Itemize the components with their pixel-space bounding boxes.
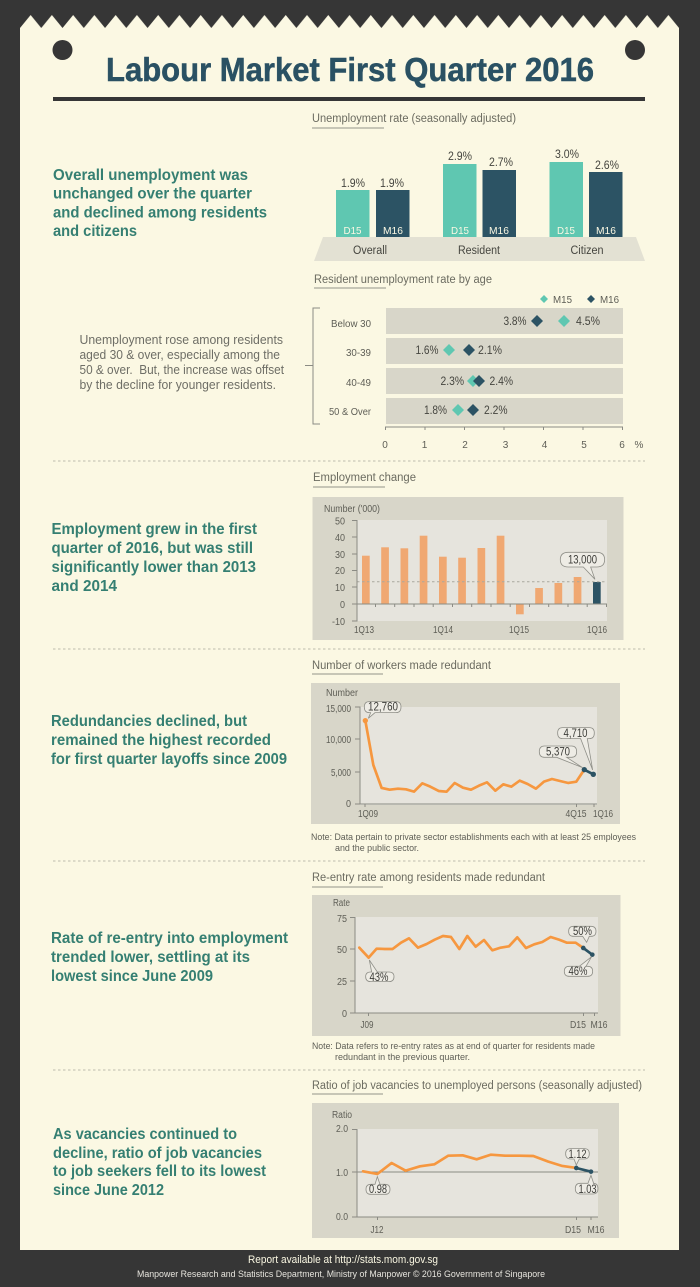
bar chart: unemployment rate: D15 bbox=[557, 225, 575, 237]
panel: overall unemployment heading: unchanged over the quarter bbox=[53, 186, 252, 202]
bar chart: employment change: 20 bbox=[335, 566, 345, 577]
callout: 13,000: 13,000 bbox=[568, 554, 597, 566]
text block: age commentary: aged 30 & over, especially among the bbox=[80, 348, 280, 362]
callout: 46% bbox=[564, 957, 593, 978]
chart title: employment change: Employment change bbox=[313, 472, 416, 484]
dot chart: unemployment by age: 4 bbox=[542, 440, 548, 451]
bar chart: employment change: 1Q15 bbox=[509, 625, 529, 636]
panel: overall unemployment heading: and declined among residents bbox=[53, 204, 267, 222]
text block: age commentary bbox=[80, 333, 284, 392]
line chart: redundancies: 1Q16 bbox=[593, 809, 613, 820]
line chart: vacancy ratio: 2.0 bbox=[336, 1124, 348, 1135]
bar chart: unemployment rate: M16 bbox=[383, 225, 403, 237]
line chart: re-entry rate: 25 bbox=[337, 977, 347, 988]
dot chart: unemployment by age: 1.8% bbox=[424, 405, 447, 417]
bar chart: unemployment rate: D15 bbox=[451, 225, 469, 237]
line chart: redundancies: 15,000 bbox=[326, 704, 351, 715]
line chart: vacancy ratio bbox=[312, 1103, 619, 1238]
panel: redundancies heading: for first quarter layoffs since 2009 bbox=[51, 751, 287, 768]
footer: Report available at http://stats.mom.gov.sg bbox=[248, 1254, 438, 1266]
line chart: vacancy ratio: Ratio bbox=[332, 1110, 352, 1121]
dot chart: unemployment by age: 5 bbox=[581, 440, 587, 451]
line chart: redundancies: 1Q09 bbox=[358, 809, 378, 820]
bar chart: unemployment rate: D15 bbox=[344, 225, 362, 237]
panel: employment heading: and 2014 bbox=[52, 578, 117, 595]
dot chart: unemployment by age: 50 & Over bbox=[329, 407, 372, 418]
dot chart: unemployment by age: 2 bbox=[462, 440, 468, 451]
callout: 1.03: 1.03 bbox=[578, 1184, 596, 1196]
note: redundancies bbox=[311, 832, 636, 853]
dot chart: unemployment by age: 30-39 bbox=[346, 348, 371, 359]
panel: re-entry heading: trended lower, settling at its bbox=[51, 949, 250, 966]
chart title: workers made redundant: Number of workers made redundant bbox=[312, 660, 492, 672]
bar chart: employment change: 30 bbox=[335, 550, 345, 561]
chart title: unemployment rate: Unemployment rate (seasonally adjusted) bbox=[312, 113, 516, 125]
panel: re-entry heading: Rate of re-entry into employment bbox=[51, 930, 288, 947]
panel: vacancies heading: decline, ratio of job vacancies bbox=[53, 1145, 262, 1162]
callout: 43%: 43% bbox=[370, 972, 388, 984]
callout: 5,370 bbox=[539, 746, 583, 768]
bar chart: employment change: 0 bbox=[340, 600, 345, 611]
text block: age commentary: Unemployment rose among residents bbox=[80, 333, 283, 347]
line chart: redundancies: 10,000 bbox=[326, 735, 351, 746]
bar chart: unemployment rate: Overall bbox=[353, 245, 387, 257]
dot chart: unemployment by age: 2.3% bbox=[440, 376, 464, 388]
dot chart: unemployment by age: 4.5% bbox=[576, 316, 600, 328]
dot chart: unemployment by age: 3 bbox=[503, 440, 509, 451]
callout: 0.98 bbox=[366, 1177, 390, 1196]
line chart: vacancy ratio: 1.0 bbox=[336, 1168, 348, 1179]
panel: vacancies heading bbox=[53, 1126, 266, 1199]
bar chart: unemployment rate: Resident bbox=[458, 245, 501, 257]
bar chart: unemployment rate bbox=[314, 149, 645, 261]
chart legend: M15 and M16: M16 bbox=[600, 295, 619, 306]
line chart: re-entry rate: J09 bbox=[360, 1020, 374, 1031]
callout: 50%: 50% bbox=[573, 926, 592, 938]
dot chart: unemployment by age: 0 bbox=[382, 440, 388, 451]
panel: overall unemployment heading: Overall unemployment was bbox=[53, 167, 248, 184]
title: Labour Market First Quarter 2016 bbox=[106, 51, 594, 88]
bar chart: unemployment rate: Citizen bbox=[570, 245, 604, 257]
chart title: vacancy ratio: Ratio of job vacancies to unemployed persons (seasonally adjusted) bbox=[312, 1080, 642, 1092]
callout: 50% bbox=[569, 926, 596, 942]
callout: 43% bbox=[366, 960, 394, 984]
line chart: redundancies bbox=[311, 683, 620, 824]
line chart: re-entry rate: Rate bbox=[333, 898, 350, 909]
panel: employment heading: Employment grew in the first bbox=[52, 521, 257, 538]
callout: 12,760: 12,760 bbox=[368, 702, 398, 714]
panel: redundancies heading bbox=[51, 713, 287, 768]
bar chart: unemployment rate: 2.9% bbox=[448, 151, 472, 163]
text block: age commentary: 50 & over. But, the increase was offset bbox=[80, 363, 284, 377]
callout: 1.03 bbox=[575, 1175, 598, 1196]
callout: 12,760 bbox=[364, 702, 401, 718]
chart title: re-entry rate: Re-entry rate among residents made redundant bbox=[312, 872, 546, 884]
note: redundancies: Note: Data pertain to private sector establishments each with at least 25 employees bbox=[311, 832, 636, 842]
panel: vacancies heading: to job seekers fell to its lowest bbox=[53, 1163, 266, 1180]
callout: 1.12 bbox=[566, 1149, 589, 1165]
bar chart: employment change: 10 bbox=[335, 583, 345, 594]
panel: employment heading: quarter of 2016, but was still bbox=[52, 540, 253, 557]
callout: 5,370: 5,370 bbox=[546, 746, 570, 758]
callout: 46%: 46% bbox=[568, 966, 588, 978]
bar chart: employment change bbox=[312, 497, 624, 640]
panel: redundancies heading: remained the highest recorded bbox=[51, 732, 271, 749]
chart legend: M15 and M16: M15 bbox=[553, 295, 572, 306]
line chart: re-entry rate: 75 bbox=[337, 914, 347, 925]
panel: overall unemployment heading: and citizens bbox=[53, 223, 137, 240]
text block: age commentary: by the decline for younger residents. bbox=[80, 378, 276, 392]
title rule bbox=[53, 97, 645, 101]
dot chart: unemployment by age: 3.8% bbox=[504, 316, 526, 328]
bar chart: unemployment rate: M16 bbox=[596, 225, 616, 237]
chart legend: M15 and M16 bbox=[540, 295, 619, 306]
panel: redundancies heading: Redundancies declined, but bbox=[51, 713, 247, 730]
dot chart: unemployment by age: % bbox=[635, 440, 644, 451]
line chart: re-entry rate: M16 bbox=[590, 1020, 608, 1031]
bar chart: employment change: 40 bbox=[335, 533, 345, 544]
note: re-entry: redundant in the previous quarter. bbox=[335, 1052, 470, 1062]
icon: right punch hole bbox=[625, 40, 645, 60]
line chart: re-entry rate bbox=[312, 895, 620, 1036]
panel: employment heading bbox=[52, 521, 257, 595]
line chart: re-entry rate: 50 bbox=[337, 945, 347, 956]
panel: employment heading: significantly lower than 2013 bbox=[52, 559, 256, 576]
dot chart: unemployment by age: 40-49 bbox=[346, 378, 371, 389]
panel: overall unemployment heading bbox=[53, 167, 267, 240]
bar chart: employment change: -10 bbox=[332, 617, 345, 628]
bar chart: employment change: 50 bbox=[335, 516, 345, 528]
callout: 4,710: 4,710 bbox=[564, 728, 588, 740]
line chart: vacancy ratio: J12 bbox=[370, 1225, 384, 1236]
bar chart: unemployment rate: M16 bbox=[489, 225, 509, 237]
footer bbox=[137, 1254, 545, 1280]
bar chart: unemployment rate: 2.7% bbox=[489, 157, 513, 169]
dot chart: unemployment by age: 1 bbox=[422, 440, 428, 451]
dot chart: unemployment by age: 1.6% bbox=[416, 345, 438, 357]
bar chart: unemployment rate: 2.6% bbox=[595, 160, 619, 172]
dot chart: unemployment by age: Below 30 bbox=[331, 319, 371, 330]
line chart: re-entry rate: 0 bbox=[342, 1009, 347, 1020]
bar chart: employment change: 1Q13 bbox=[354, 625, 374, 636]
line chart: redundancies: 5,000 bbox=[331, 768, 351, 779]
panel: re-entry heading: lowest since June 2009 bbox=[51, 968, 213, 985]
line chart: vacancy ratio: 0.0 bbox=[336, 1212, 348, 1223]
icon: left punch hole bbox=[52, 40, 72, 60]
chart title: resident unemployment by age: Resident unemployment rate by age bbox=[314, 274, 492, 286]
line chart: redundancies: Number bbox=[326, 688, 359, 699]
line chart: re-entry rate: D15 bbox=[570, 1020, 586, 1031]
panel: vacancies heading: As vacancies continued to bbox=[53, 1126, 237, 1143]
note: re-entry bbox=[312, 1041, 595, 1062]
dot chart: unemployment by age: 2.1% bbox=[478, 345, 502, 357]
dot chart: unemployment by age: 2.2% bbox=[484, 405, 508, 417]
panel: vacancies heading: since June 2012 bbox=[53, 1182, 164, 1199]
bar chart: employment change: 1Q16 bbox=[587, 625, 607, 636]
panel: re-entry heading bbox=[51, 930, 288, 985]
note: re-entry: Note: Data refers to re-entry rates as at end of quarter for residents made bbox=[312, 1041, 595, 1051]
line chart: redundancies: 4Q15 bbox=[566, 809, 587, 820]
callout: 13,000 bbox=[560, 552, 605, 579]
dot chart: unemployment by age bbox=[305, 308, 644, 451]
line chart: vacancy ratio: D15 bbox=[565, 1225, 581, 1236]
dot chart: unemployment by age: 2.4% bbox=[490, 376, 513, 388]
bar chart: unemployment rate: 1.9% bbox=[341, 178, 365, 190]
bar chart: employment change: Number ('000) bbox=[324, 504, 380, 515]
callout: 1.12: 1.12 bbox=[568, 1149, 586, 1161]
line chart: redundancies: 0 bbox=[346, 799, 351, 810]
note: redundancies: and the public sector. bbox=[335, 843, 419, 853]
bar chart: unemployment rate: 1.9% bbox=[380, 178, 404, 190]
line chart: vacancy ratio: M16 bbox=[588, 1225, 605, 1236]
bar chart: unemployment rate: 3.0% bbox=[555, 149, 579, 161]
footer: Manpower Research and Statistics Department, Ministry of Manpower © 2016 Government of Singapore bbox=[137, 1269, 545, 1280]
callout: 0.98: 0.98 bbox=[369, 1184, 387, 1196]
callout: 4,710 bbox=[558, 728, 594, 770]
dot chart: unemployment by age: 6 bbox=[619, 440, 625, 451]
bar chart: employment change: 1Q14 bbox=[433, 625, 453, 636]
